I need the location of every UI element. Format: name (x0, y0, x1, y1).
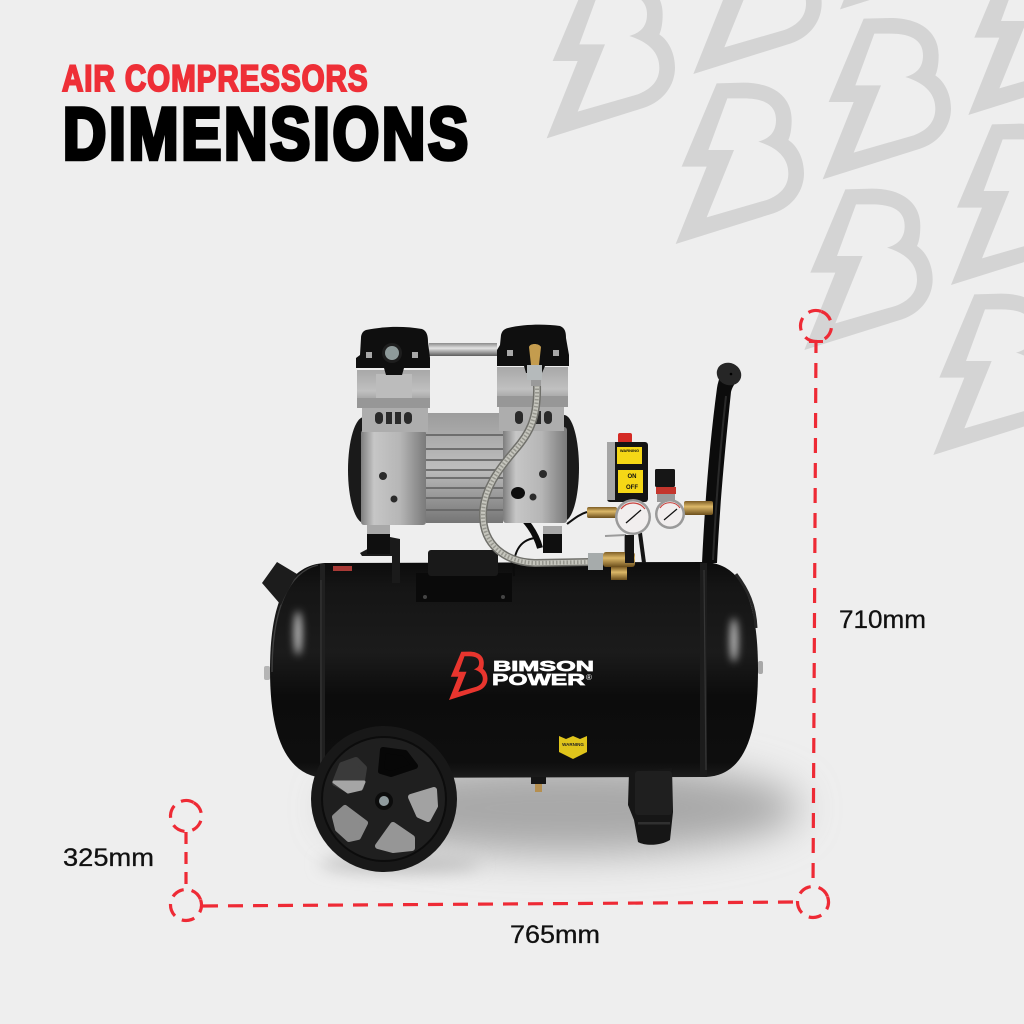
connecting rod (429, 343, 497, 356)
brand logo: POWER (492, 672, 586, 689)
right housing (497, 367, 568, 523)
title: dimensions: DIMENSIONS (63, 94, 468, 175)
pressure switch: OFF (626, 485, 638, 491)
left housing (357, 370, 430, 525)
brass side connectors (567, 501, 713, 524)
motor pump (348, 325, 579, 525)
brand logo: BIMSON (493, 658, 594, 675)
rear rubber ends (348, 415, 579, 523)
title: air compressors: AIR COMPRESSORS (62, 59, 368, 100)
finned motor (426, 413, 503, 523)
large pressure gauge (615, 499, 651, 535)
rear foot (628, 768, 673, 845)
dimension: height 710mm (796, 306, 926, 888)
wheel (311, 726, 457, 872)
left mount bracket (360, 523, 400, 583)
air compressor product (262, 325, 763, 872)
braided hose (483, 385, 590, 563)
left head cap (356, 327, 430, 375)
dimension: width 765mm: 765mm (510, 921, 600, 949)
right head cap (497, 325, 569, 373)
pressure switch: WARNING (620, 448, 639, 453)
warning sticker: WARNING (562, 742, 584, 747)
right mount foot (513, 507, 562, 576)
pressure switch: ON (628, 474, 636, 480)
bottom brass fitting (588, 533, 644, 580)
brand logo: ® (586, 673, 592, 682)
small pressure gauge (655, 499, 685, 529)
warning sticker (559, 736, 587, 759)
dimension: depth 325mm: 325mm (63, 844, 154, 872)
dimension: depth 325mm (63, 795, 207, 925)
tank (264, 562, 763, 778)
dimension: width 765mm (203, 882, 833, 949)
watermark: lightning B pattern (547, 0, 1024, 455)
brand logo (449, 652, 594, 700)
tank side bracket (262, 562, 297, 605)
centre junction box (416, 550, 512, 602)
carry handle tube (702, 359, 745, 563)
top brass fitting (527, 344, 542, 386)
regulator (655, 469, 676, 502)
drain valve (531, 777, 546, 792)
dimension: height 710mm: 710mm (839, 606, 926, 634)
floor shadow (320, 762, 800, 873)
pressure switch (607, 433, 648, 502)
